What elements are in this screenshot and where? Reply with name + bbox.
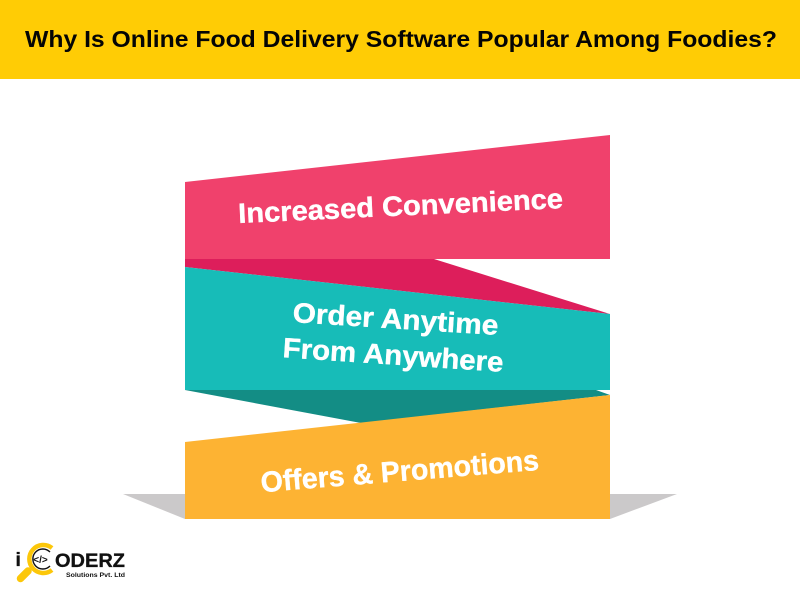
ribbon fold: pink	[185, 259, 610, 314]
header banner	[0, 0, 800, 79]
logo wordmark: ODERZ	[55, 550, 125, 572]
panel: offers and promotions	[185, 395, 610, 519]
panel label: order anytime from anywhere: From Anywhere	[282, 332, 504, 378]
logo: iCoderz	[16, 545, 125, 579]
panel label: increased convenience: Increased Convenience	[238, 183, 564, 229]
panel label: order anytime from anywhere: Order Anytime	[292, 297, 499, 341]
ribbon fold: teal	[185, 390, 610, 423]
logo subtitle: Solutions Pvt. Ltd	[66, 572, 125, 579]
icon: magnifying glass: </>	[33, 555, 48, 566]
ribbon shadow: left	[123, 494, 185, 519]
panel label: offers and promotions: Offers & Promotions	[259, 445, 540, 499]
ribbon shadow: right	[610, 494, 677, 519]
panel label: order anytime from anywhere	[282, 297, 504, 378]
logo letter i: i	[16, 549, 21, 571]
panel: increased convenience	[185, 135, 610, 259]
title: Why Is Online Food Delivery Software Popular Among Foodies?	[25, 26, 777, 52]
panel: order anytime from anywhere	[185, 267, 610, 390]
